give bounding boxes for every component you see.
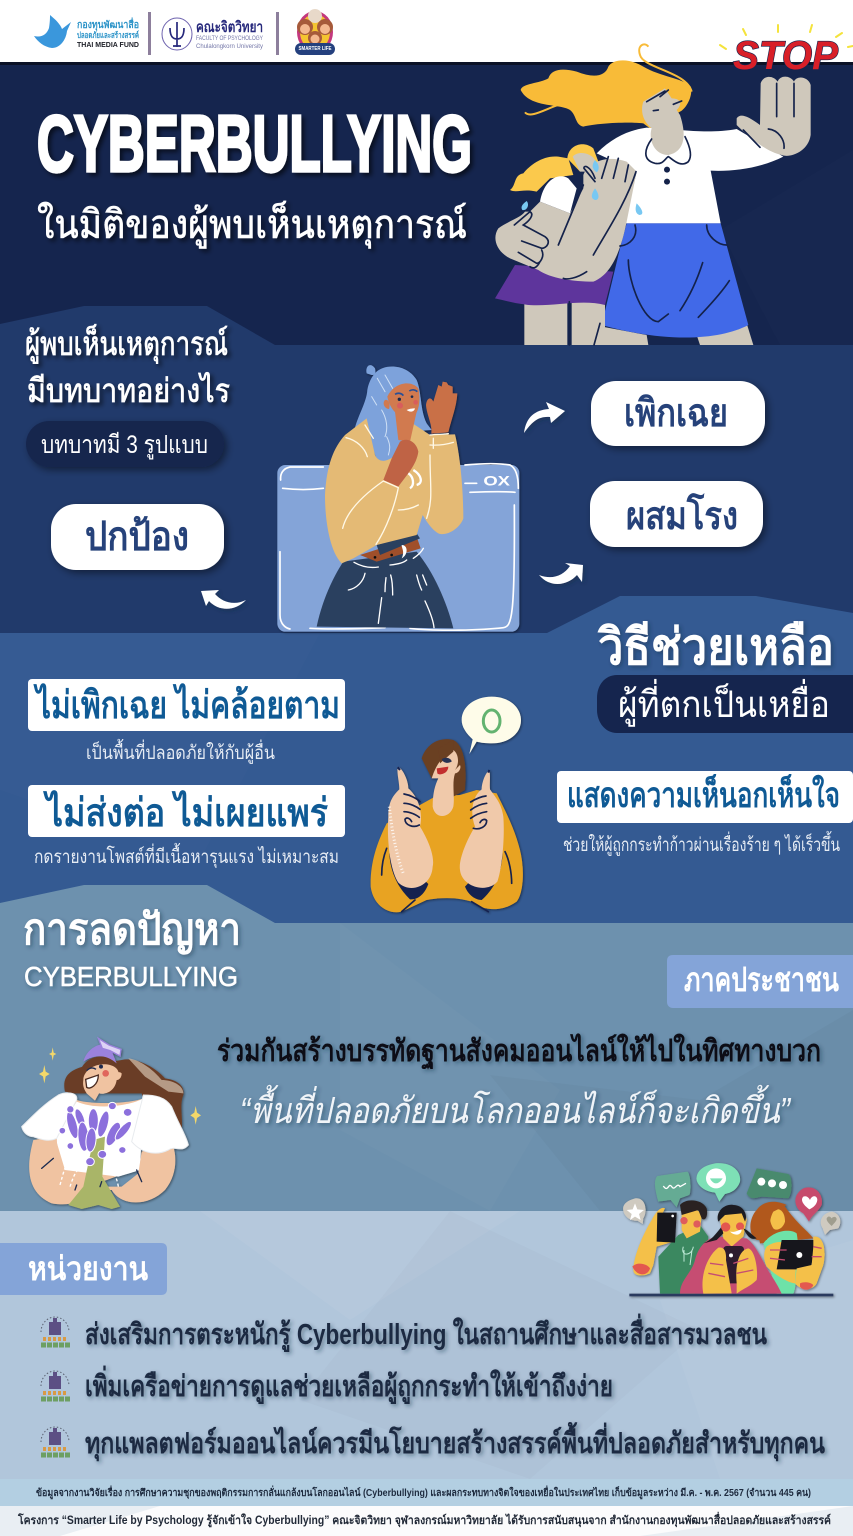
panel: roles section (0, 306, 853, 633)
card: do not ignore: ไม่เพิกเฉย ไม่คล้อยตาม (33, 683, 340, 727)
heading: witness role: มีบทบาทอย่างไร (27, 372, 230, 409)
pill: intervene (51, 504, 224, 570)
tag: agencies (0, 1243, 167, 1295)
logo: Faculty of Psychology (162, 18, 264, 50)
icon: organisation (41, 1317, 70, 1345)
logo: Smarter Life (295, 9, 335, 55)
logo: Thai Media Fund: กองทุนพัฒนาสื่อ (77, 17, 139, 31)
tag: agencies: หน่วยงาน (28, 1250, 148, 1287)
illustration: woman holding lavender bouquet (22, 1038, 201, 1209)
logo: Smarter Life: SMARTER LIFE (298, 46, 332, 52)
list item: expand support network: เพิ่มเครือข่ายการดูแลช่วยเหลือผู้ถูกกระทำให้เข้าถึงง่าย (85, 1365, 613, 1404)
panel: header background (0, 0, 853, 64)
panel: public sector section (0, 885, 853, 1211)
card: do not ignore (28, 679, 345, 731)
heading: witness role (25, 324, 230, 409)
icon: STOP sign lettering: STOP (733, 34, 838, 78)
arrow: to intervene (201, 590, 246, 609)
pill: ignore: เพิกเฉย (624, 392, 728, 435)
pill: three role types: บทบาทมี 3 รูปแบบ (41, 431, 208, 460)
heading: reducing the problem (23, 906, 241, 992)
subtitle: ในมิติของผู้พบเห็นเหตุการณ์ (37, 200, 467, 249)
tag: public sector (667, 955, 853, 1008)
logo: Faculty of Psychology: คณะจิตวิทยา (196, 18, 263, 36)
caption: safe space: เป็นพื้นที่ปลอดภัยให้กับผู้อื่น (86, 739, 275, 764)
logo: Thai Media Fund (34, 15, 139, 49)
pill: join in: ผสมโรง (626, 493, 738, 538)
logo: Faculty of Psychology: FACULTY OF PSYCHOLOGY (196, 36, 263, 42)
illustration: woman giving two thumbs up (371, 697, 523, 912)
logo: Thai Media Fund: THAI MEDIA FUND (77, 42, 139, 49)
banner: victims (597, 675, 853, 733)
banner: victims: ผู้ที่ตกเป็นเหยื่อ (618, 678, 830, 727)
logo: Thai Media Fund: ปลอดภัยและสร้างสรรค์ (77, 30, 139, 40)
icon: organisation (41, 1427, 70, 1455)
illustration: worried woman emerging from browser window (277, 365, 519, 632)
panel: help section (0, 596, 853, 923)
heading: reducing the problem: CYBERBULLYING (24, 961, 238, 992)
panel: title section (0, 62, 853, 346)
caption: report posts: กดรายงานโพสต์ที่มีเนื้อหารุนแรง ไม่เหมาะสม (34, 843, 339, 869)
illustration: worried woman emerging from browser window: OX (483, 473, 511, 489)
divider: second logo separator (276, 12, 279, 55)
heading: how to help: วิธีช่วยเหลือ (597, 619, 834, 675)
title: CYBERBULLYING (37, 99, 472, 188)
panel: source note strip (0, 1479, 853, 1506)
pill: join in (590, 481, 763, 547)
list item: expand support network (41, 1365, 613, 1404)
pill: intervene: ปกป้อง (85, 515, 189, 559)
panel: agencies section (0, 1211, 853, 1479)
illustration: friends using phones with chat bubbles (623, 1163, 840, 1296)
heading: reducing the problem: การลดปัญหา (23, 906, 241, 955)
icon: organisation (41, 1371, 70, 1399)
arrow: to ignore (524, 402, 565, 433)
divider: first logo separator (148, 12, 151, 55)
card: do not share: ไม่ส่งต่อ ไม่เผยแพร่ (43, 790, 328, 835)
illustration: woman shielding child with stop gesture (495, 44, 811, 345)
panel: project credit strip (0, 1506, 853, 1536)
logo: Faculty of Psychology: Chulalongkorn University (196, 43, 264, 50)
heading: witness role: ผู้พบเห็นเหตุการณ์ (25, 324, 228, 364)
pill: three role types (26, 421, 224, 467)
icon: STOP sign lettering (720, 25, 853, 78)
arrow: to join in (539, 563, 583, 584)
pill: ignore (591, 381, 765, 446)
